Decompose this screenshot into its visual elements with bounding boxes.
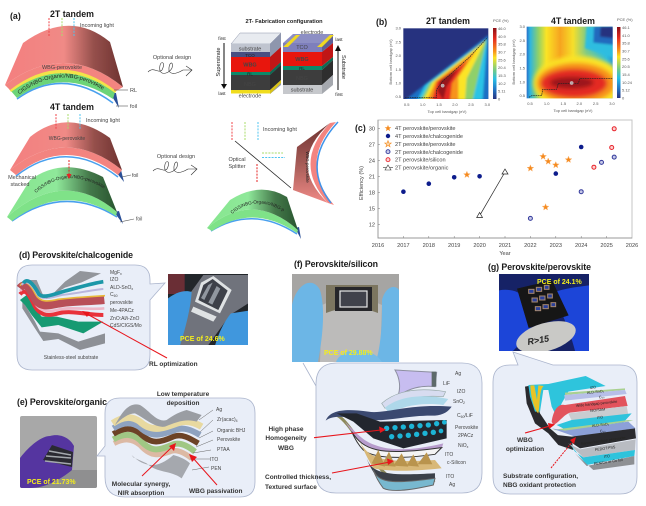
label: mechanical stacked bbox=[8, 175, 36, 188]
icon: optical splitter rays bbox=[232, 122, 285, 183]
legend: 2T colorbar: 25.6 bbox=[498, 57, 507, 62]
layer labels f: /LiF bbox=[465, 413, 473, 419]
axis labels: 2016 bbox=[372, 243, 384, 249]
icon: 2T curved cell: WBG-perovskite bbox=[42, 65, 82, 71]
icon: 4T bottom cell: CIGS/NBG-Organic/NBG-perovskite bbox=[34, 174, 105, 192]
label: optical splitter: Optical bbox=[228, 157, 246, 163]
axis labels: 2026 bbox=[626, 243, 638, 249]
axis labels: 24 bbox=[369, 158, 375, 164]
arrow: superstrate direction: last bbox=[218, 91, 226, 96]
legend: 4T colorbar: 25.6 bbox=[622, 56, 631, 61]
layer labels d bbox=[44, 270, 142, 361]
legend: 2T colorbar: 15.3 bbox=[498, 73, 507, 78]
axis labels: 2018 bbox=[423, 243, 435, 249]
data: 4T perovskite/chalcogenide bbox=[401, 145, 584, 194]
chart: 2T heatmap bbox=[403, 28, 490, 100]
legend: 2T perovskite/perovskite bbox=[395, 142, 456, 148]
stack: superstrate: WBG bbox=[243, 62, 257, 68]
label: molecular synergy: Molecular synergy, bbox=[112, 481, 170, 488]
label: optical splitter: Splitter bbox=[228, 164, 246, 170]
label: low temperature deposition: deposition bbox=[167, 400, 199, 407]
axes: 4T ticks and labels: 0.5 bbox=[527, 101, 534, 106]
legend: 2T colorbar: 0 bbox=[498, 96, 501, 102]
label: substrate configuration: Substrate configuration, bbox=[503, 473, 578, 480]
axes: 2T ticks and labels: 2.5 bbox=[395, 40, 402, 44]
stack labels g: PEDOT:PSS bbox=[595, 445, 616, 452]
stack labels g: ITO bbox=[597, 415, 603, 420]
stack labels g: C₆₀ bbox=[600, 429, 606, 433]
label: incoming light splitter: Incoming light bbox=[263, 127, 297, 133]
panel label b: (b) bbox=[376, 17, 387, 27]
layer labels f: 60 bbox=[461, 415, 465, 419]
axes: 4T ticks and labels: 3.0 bbox=[609, 101, 616, 106]
arrow: WBG passivation bbox=[189, 454, 217, 485]
layer labels d: C bbox=[110, 292, 114, 298]
legend: 4T colorbar: 10.24 bbox=[622, 80, 633, 85]
axes: 4T ticks and labels: Bottom cell bandgap (eV) bbox=[511, 39, 516, 85]
label: low temperature deposition bbox=[157, 391, 210, 407]
layer labels e: Zr(acac) bbox=[217, 417, 236, 423]
legend: 4T colorbar: 5.12 bbox=[622, 88, 631, 93]
diagram: layer stack g bbox=[525, 376, 636, 470]
axes: 2T ticks and labels bbox=[388, 26, 491, 114]
arrow: high phase homogeneity bbox=[314, 426, 386, 438]
diagram: layer stack d bbox=[20, 271, 105, 350]
axis labels: 21 bbox=[369, 174, 375, 180]
label: foil bbox=[116, 104, 137, 110]
axes: 2T ticks and labels: 1.5 bbox=[395, 67, 402, 72]
legend: 2T colorbar: 5.11 bbox=[498, 89, 506, 94]
label: mechanical stacked: stacked bbox=[11, 182, 29, 188]
axis labels: Year bbox=[499, 251, 511, 257]
arrow: red mechanical stack ray bbox=[66, 160, 72, 179]
axes: 2T ticks and labels: 2.0 bbox=[395, 53, 402, 58]
axis labels: 15 bbox=[369, 206, 375, 212]
panel f: perovskite/silicon bbox=[265, 259, 482, 493]
axes: 2T ticks and labels: 3.0 bbox=[485, 102, 491, 107]
photo g: PCE of 24.1% bbox=[537, 279, 583, 286]
photo f bbox=[292, 274, 399, 362]
axes: 4T ticks and labels: 2.5 bbox=[593, 101, 599, 106]
panel g: perovskite/perovskite bbox=[488, 262, 637, 494]
layer labels e: 4 bbox=[236, 419, 238, 423]
stack: substrate: TCO bbox=[296, 45, 309, 51]
axes: 4T ticks and labels bbox=[511, 24, 616, 113]
label: optical splitter bbox=[228, 157, 246, 170]
layer labels e: Ag bbox=[216, 407, 222, 413]
legend: 2T colorbar: 35.8 bbox=[498, 42, 507, 47]
photo g: R>15 bbox=[527, 333, 551, 347]
stack labels g: C₆₀ bbox=[599, 395, 605, 399]
stack labels g bbox=[576, 385, 626, 466]
arrow: substrate direction: last bbox=[335, 37, 343, 42]
data: perovskite/perovskite stars bbox=[464, 153, 572, 210]
data: 2T perovskite/organic bbox=[477, 169, 508, 218]
legend: 4T colorbar bbox=[617, 17, 633, 100]
arrow: molecular synergy bbox=[142, 443, 176, 476]
stack: superstrate bbox=[231, 33, 281, 100]
layer labels f: 2 bbox=[463, 401, 465, 405]
label: controlled thickness: Textured surface bbox=[265, 484, 317, 491]
legend: 4T colorbar: 41.0 bbox=[622, 33, 631, 38]
icon: splitter side cell bbox=[293, 122, 338, 205]
axes: 2T ticks and labels: 1.0 bbox=[395, 80, 402, 86]
label: RL: RL bbox=[130, 88, 137, 94]
icon: splitter side cell: WBG-perovskite bbox=[305, 151, 310, 183]
legend: 4T perovskite/chalcogenide bbox=[395, 134, 463, 140]
photo f: PCE of 29.88% bbox=[324, 350, 373, 357]
axes: 4T ticks and labels: 1.5 bbox=[519, 66, 526, 70]
axes: 2T ticks and labels: 1.5 bbox=[436, 102, 443, 107]
layer labels d: IZO bbox=[110, 277, 118, 283]
stack: superstrate: NBG bbox=[244, 82, 256, 88]
axis labels: 2021 bbox=[499, 243, 511, 249]
legend: 2T perovskite/organic bbox=[395, 166, 449, 172]
layer labels e: Organic BHJ bbox=[217, 428, 246, 434]
layer labels d: x bbox=[131, 287, 133, 291]
data: 2T perovskite/chalcogenide bbox=[528, 155, 616, 220]
label: WBG passivation: WBG passivation bbox=[189, 488, 242, 495]
legend: 4T colorbar: PCE (%) bbox=[617, 17, 633, 22]
axis labels: 30 bbox=[369, 126, 375, 132]
legend: 4T colorbar: 20.5 bbox=[622, 64, 631, 69]
icon: 4T top cell: WBG-perovskite bbox=[49, 136, 85, 142]
layer labels f: IZO bbox=[457, 389, 465, 395]
axes: 4T ticks and labels: 1.5 bbox=[561, 101, 567, 106]
layer labels d: ZnO:Al/i-ZnO bbox=[110, 316, 140, 322]
axes: 2T ticks and labels: Top cell bandgap (eV) bbox=[428, 109, 467, 114]
arrow: controlled thickness bbox=[332, 458, 394, 473]
layer labels e: ITO bbox=[210, 457, 218, 463]
legend: 4T colorbar: 0 bbox=[622, 96, 625, 100]
label: controlled thickness bbox=[265, 474, 331, 491]
layer labels f: LiF bbox=[443, 381, 450, 387]
label: high phase homogeneity WBG bbox=[265, 426, 307, 452]
layer labels d: Me-4PACz bbox=[110, 308, 134, 314]
axes: 2T ticks and labels: 2.5 bbox=[468, 102, 475, 107]
layer labels f: NiO bbox=[458, 443, 467, 449]
layer labels f bbox=[443, 371, 479, 488]
stack labels g: PEN/Cu or Cu foil bbox=[594, 458, 623, 466]
label: incoming light: Incoming light bbox=[80, 23, 114, 29]
icon: splitter bottom cell bbox=[32, 122, 326, 239]
layer labels f: Ag bbox=[449, 482, 455, 488]
axis labels: 12 bbox=[369, 222, 375, 228]
axes: 4T ticks and labels: 2.5 bbox=[519, 38, 526, 43]
icon: 4T top cell bbox=[10, 122, 124, 182]
label: substrate configuration bbox=[503, 473, 578, 489]
axes: 4T ticks and labels: 2.0 bbox=[519, 52, 526, 56]
icon: optical splitter mirror bbox=[235, 141, 291, 188]
arrow: optional design 4T bbox=[153, 154, 197, 175]
arrow: substrate configuration bbox=[551, 437, 576, 468]
callout bubble g bbox=[493, 352, 637, 494]
layer labels d: x bbox=[120, 272, 122, 276]
arrow: substrate direction: first bbox=[335, 92, 343, 97]
legend: 2T colorbar: PCE (%) bbox=[493, 18, 509, 23]
callout bubble f bbox=[303, 363, 482, 493]
legend: 4T colorbar: 15.4 bbox=[622, 72, 631, 77]
axis labels: 2022 bbox=[524, 243, 537, 249]
diagram: layer stack e bbox=[113, 404, 202, 478]
layer labels d: MgF bbox=[110, 270, 120, 276]
axes: 4T ticks and labels: 1.0 bbox=[519, 80, 526, 84]
callout bubble d bbox=[17, 265, 165, 370]
layer labels d: 60 bbox=[114, 294, 118, 298]
axis labels: 2017 bbox=[397, 243, 410, 249]
stack: substrate: RL bbox=[299, 66, 305, 71]
chart frame and axes bbox=[378, 120, 632, 238]
data: 2T perovskite/silicon bbox=[592, 127, 616, 169]
axes: 4T ticks and labels: 1.0 bbox=[544, 101, 550, 106]
label: low temperature deposition: Low temperature bbox=[157, 391, 210, 398]
axes: 2T ticks and labels: 3.0 bbox=[395, 26, 402, 30]
arrow: optional design 4T: Optional design bbox=[157, 154, 195, 160]
axes: 2T ticks and labels: 1.0 bbox=[420, 102, 426, 107]
arrow: WBG optimization bbox=[525, 423, 555, 433]
legend: 2T colorbar bbox=[493, 18, 509, 102]
legend: 2T colorbar: 30.7 bbox=[498, 50, 507, 54]
layer labels f: SnO bbox=[453, 399, 463, 405]
stack: superstrate: RL bbox=[247, 72, 253, 76]
label: high phase homogeneity WBG: WBG bbox=[278, 445, 294, 452]
heading d: (d) Perovskite/chalcogenide bbox=[19, 250, 133, 260]
icon: incoming light rays 2T bbox=[49, 18, 74, 36]
layer labels e bbox=[210, 407, 246, 472]
axes: 4T ticks and labels: 2.0 bbox=[577, 101, 583, 106]
heading: fabrication configuration: 2T- Fabrication configuration bbox=[245, 19, 323, 25]
layer labels f: Ag bbox=[455, 371, 461, 377]
layer labels d: ALD-SnO bbox=[110, 285, 131, 291]
label: high phase homogeneity WBG: High phase bbox=[268, 426, 304, 433]
label: foil 4T: foil bbox=[132, 173, 138, 179]
heading e: (e) Perovskite/organic bbox=[17, 397, 107, 407]
heading: 4T tandem: 4T tandem bbox=[50, 102, 94, 112]
legend: 2T perovskite/chalcogenide bbox=[395, 150, 463, 156]
icon: incoming light rays 4T bbox=[56, 114, 80, 130]
legend: 2T colorbar: 20.4 bbox=[498, 65, 507, 70]
layer labels f: 2PACz bbox=[458, 433, 474, 439]
axes: 2T ticks and labels: 0.5 bbox=[395, 94, 402, 99]
stack labels g: ALD-SnO₂ bbox=[592, 422, 610, 428]
layer labels f: C bbox=[457, 413, 461, 419]
label: foil: foil bbox=[130, 104, 137, 110]
stack labels g: NiO/SAM bbox=[590, 407, 605, 413]
label: WBG optimization bbox=[506, 437, 544, 453]
panel label c: (c) bbox=[355, 123, 366, 133]
arrow: RL optimization bbox=[82, 311, 167, 358]
axis labels: 2023 bbox=[550, 243, 562, 249]
label: molecular synergy bbox=[112, 481, 170, 497]
label: foil 4T bbox=[120, 173, 142, 222]
label: controlled thickness: Controlled thickness, bbox=[265, 474, 331, 481]
layer labels e: Perovskite bbox=[217, 437, 241, 443]
stack labels g: Wide bandgap perovskite bbox=[576, 400, 618, 408]
legend: 2T colorbar: 46.0 bbox=[498, 26, 507, 31]
layer labels f: Perovskite bbox=[455, 425, 479, 431]
stack: substrate bbox=[283, 30, 334, 94]
layer labels f: x bbox=[467, 445, 469, 449]
axes: 4T ticks and labels: 0.5 bbox=[519, 93, 526, 98]
axis labels: 2024 bbox=[575, 243, 587, 249]
panel b: heatmaps bbox=[376, 16, 633, 114]
layer labels d: Stainless-steel substrate bbox=[44, 355, 98, 361]
layer labels d: CdS/CIGS/Mo bbox=[110, 323, 142, 329]
layer labels e: PTAA bbox=[217, 447, 230, 453]
axes: 2T ticks and labels: 0.5 bbox=[404, 102, 410, 107]
label: WBG optimization: optimization bbox=[506, 446, 544, 453]
photo d bbox=[168, 274, 248, 346]
heading: 2T tandem: 2T tandem bbox=[50, 9, 94, 19]
heading: 4T heatmap title: 4T tandem bbox=[551, 16, 595, 26]
legend: 4T colorbar: 30.7 bbox=[622, 48, 631, 54]
legend bbox=[383, 125, 463, 172]
label: RL optimization: RL optimization bbox=[149, 361, 198, 368]
chart: 4T heatmap bbox=[526, 26, 613, 98]
panel label a: (a) bbox=[10, 11, 21, 21]
layer labels f: ITO bbox=[445, 452, 453, 458]
panel c: efficiency chart bbox=[355, 120, 638, 257]
arrow: superstrate direction bbox=[216, 36, 227, 96]
axes: 4T ticks and labels: Top cell bandgap (eV) bbox=[554, 108, 593, 113]
photo g bbox=[499, 274, 590, 359]
stack labels g: IZO bbox=[590, 385, 596, 390]
arrow: superstrate direction: Superstrate bbox=[216, 48, 222, 76]
arrow: optional design 2T: Optional design bbox=[153, 55, 191, 61]
legend: 2T perovskite/silicon bbox=[395, 158, 446, 164]
layer labels f: ITO bbox=[446, 474, 454, 480]
icon: splitter bottom cell: CIGS/NBG-Organic/NBG-perovskite bbox=[32, 122, 326, 230]
diagram: layer stack f bbox=[326, 370, 452, 490]
axis labels bbox=[359, 126, 638, 257]
label: RL bbox=[114, 88, 137, 94]
label: mechanical stacked: Mechanical bbox=[8, 175, 36, 181]
arrow: optional design 2T bbox=[148, 55, 192, 76]
axes: 4T ticks and labels: 3.0 bbox=[519, 24, 526, 29]
photo d: PCE of 24.6% bbox=[180, 336, 226, 343]
stack: substrate: NBG bbox=[296, 76, 308, 82]
axis labels: 18 bbox=[369, 190, 375, 196]
icon: 2T curved cell bbox=[5, 26, 123, 108]
callout bubble e bbox=[97, 398, 255, 497]
layer labels d: perovskite bbox=[110, 300, 133, 306]
panel a: tandem designs bbox=[5, 9, 346, 239]
photo e bbox=[20, 416, 97, 488]
stack: superstrate: substrate bbox=[239, 46, 261, 52]
legend: 2T colorbar: 10.2 bbox=[498, 81, 507, 86]
layer labels e: PEN bbox=[211, 466, 222, 472]
panel e: perovskite/organic bbox=[17, 391, 255, 497]
panel d: perovskite/chalcogenide bbox=[17, 250, 248, 370]
legend: 4T colorbar: 35.8 bbox=[622, 41, 631, 46]
arrow: substrate direction: Substrate bbox=[340, 55, 346, 79]
stack labels g: ALD-SnO₂ bbox=[587, 389, 605, 395]
arrow: substrate direction bbox=[335, 37, 346, 97]
icon: 4T bottom cell bbox=[7, 167, 123, 224]
layer labels f: c-Silicon bbox=[447, 460, 466, 466]
heading g: (g) Perovskite/perovskite bbox=[488, 262, 591, 272]
label: incoming light 4T: Incoming light bbox=[86, 118, 120, 124]
axis labels: 2019 bbox=[448, 243, 460, 249]
axis labels: 2020 bbox=[473, 243, 486, 249]
axis labels: 27 bbox=[369, 142, 375, 148]
legend: 4T perovskite/perovskite bbox=[395, 126, 456, 132]
stack: superstrate: electrode bbox=[239, 94, 261, 100]
axes: 2T ticks and labels: Bottom cell bandgap (eV) bbox=[388, 39, 393, 85]
label: high phase homogeneity WBG: Homogeneity bbox=[265, 435, 307, 442]
legend: 4T colorbar: 46.1 bbox=[622, 25, 631, 30]
arrow: superstrate direction: first bbox=[218, 36, 226, 41]
icon: 2T curved cell: CIGS/NBG-Organic/NBG-perovskite bbox=[18, 74, 104, 94]
label: substrate configuration: NBG oxidant protection bbox=[503, 482, 576, 489]
heading: 2T heatmap title: 2T tandem bbox=[426, 16, 470, 26]
label: molecular synergy: NIR absorption bbox=[118, 490, 164, 497]
stack: superstrate: TCO bbox=[245, 53, 255, 58]
stack: substrate: substrate bbox=[291, 88, 313, 94]
axis labels: 2025 bbox=[600, 243, 613, 249]
stack: substrate: WBG bbox=[295, 57, 309, 63]
axes: 2T ticks and labels: 2.0 bbox=[452, 102, 459, 107]
stack labels g: ITO bbox=[604, 454, 610, 459]
arrows: labels e bbox=[190, 410, 213, 470]
heading f: (f) Perovskite/silicon bbox=[294, 259, 378, 269]
photo e: PCE of 21.73% bbox=[27, 479, 76, 486]
axis labels: Efficiency (%) bbox=[359, 166, 365, 200]
label: WBG optimization: WBG bbox=[517, 437, 533, 444]
stack: substrate: electrode bbox=[301, 30, 323, 36]
legend: 2T colorbar: 40.9 bbox=[498, 34, 507, 39]
label: foil 4T: foil bbox=[136, 216, 142, 222]
stack labels g: Narrow bandgap perovskite bbox=[581, 436, 626, 446]
